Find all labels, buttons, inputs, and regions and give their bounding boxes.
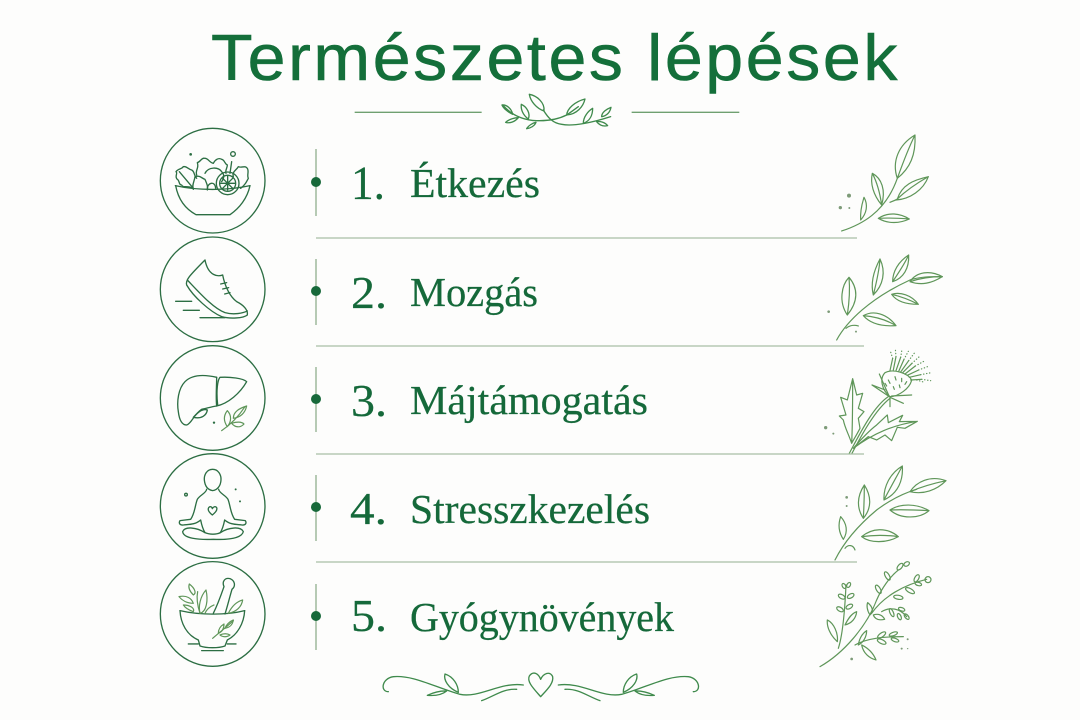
sprig 3: thistle bbox=[824, 349, 931, 453]
label 1: Étkezés bbox=[410, 160, 540, 206]
icon: meditating figure bbox=[160, 454, 265, 558]
icon: running shoe bbox=[160, 237, 265, 342]
row line 1 bbox=[316, 237, 857, 239]
step 3 row bbox=[160, 346, 931, 453]
label 4: Stresszkezelés bbox=[410, 486, 650, 532]
icon: mortar and pestle with herbs bbox=[160, 562, 265, 666]
label 5: Gyógynövények bbox=[410, 594, 674, 640]
divider and bullet 2 bbox=[311, 259, 321, 325]
step 4 row bbox=[160, 454, 946, 560]
row line 4 bbox=[316, 561, 857, 563]
number 3: 3. bbox=[351, 375, 387, 426]
bottom ornament with heart bbox=[383, 673, 699, 701]
step 5 row bbox=[160, 561, 931, 667]
title: Természetes lépések bbox=[211, 21, 900, 94]
label 3: Májtámogatás bbox=[410, 377, 648, 423]
divider and bullet 3 bbox=[311, 367, 321, 432]
label 2: Mozgás bbox=[410, 269, 538, 315]
divider and bullet 1 bbox=[311, 149, 321, 216]
sprig 2 bbox=[827, 255, 942, 340]
icon: salad bowl bbox=[160, 128, 265, 233]
number 2: 2. bbox=[351, 267, 387, 318]
number 5: 5. bbox=[351, 590, 387, 641]
divider and bullet 5 bbox=[311, 584, 321, 650]
row line 2 bbox=[316, 345, 864, 347]
title ornament bbox=[355, 94, 739, 129]
divider and bullet 4 bbox=[311, 475, 321, 541]
sprig 1 bbox=[839, 135, 928, 231]
sprig 4 bbox=[835, 466, 946, 560]
number 1: 1. bbox=[351, 157, 385, 210]
row line 3 bbox=[316, 453, 864, 455]
number 4: 4. bbox=[350, 483, 387, 534]
step 1 row bbox=[160, 128, 928, 233]
sprig 5: herb bbox=[820, 561, 931, 667]
step 2 row bbox=[160, 237, 942, 342]
icon: liver with leaf bbox=[160, 346, 265, 450]
